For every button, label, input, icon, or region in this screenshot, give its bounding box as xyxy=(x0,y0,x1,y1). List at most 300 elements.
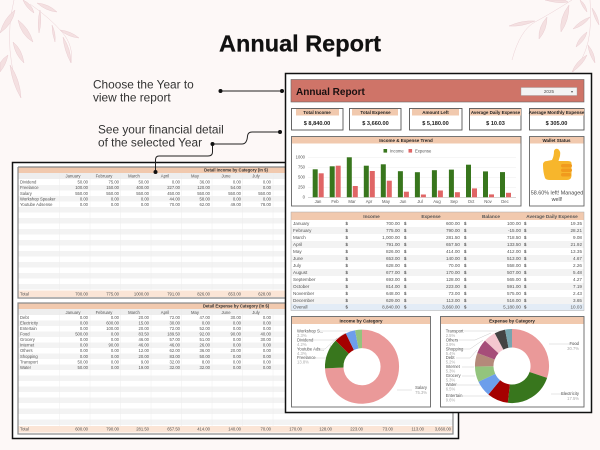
table: monthly summary: Income xyxy=(363,214,380,219)
panel: detail income table: 700.00 xyxy=(75,292,89,296)
panel: detail income table: 0.00 xyxy=(233,180,242,184)
panel: detail income table: 550.00 xyxy=(106,191,120,196)
table: monthly summary: October xyxy=(293,284,310,289)
panel: detail expense table: 0.00 xyxy=(80,337,89,342)
panel: detail expense table: 790.00 xyxy=(106,426,120,432)
panel: detail expense table: 0.00 xyxy=(111,365,120,370)
panel: detail income table: March xyxy=(128,174,140,178)
chart: income and expense trend: Income & Expense Trend xyxy=(379,138,433,143)
table: monthly summary: 814.00 xyxy=(386,284,400,289)
panel: detail expense table: 9.00 xyxy=(141,360,150,364)
table: monthly summary: $ xyxy=(464,235,467,240)
chart: expense by category donut: Shopping xyxy=(446,346,464,352)
panel: detail expense table: 47.00 xyxy=(200,315,211,320)
panel: detail income table: 58.00 xyxy=(200,196,211,202)
panel: detail expense table: 70.00 xyxy=(261,426,272,432)
panel: detail expense table: 414.00 xyxy=(197,426,211,432)
chart: expense by category donut: Transport xyxy=(446,328,464,334)
chart: expense by category donut: Water xyxy=(446,382,457,387)
table: monthly summary: 516.00 xyxy=(507,298,521,303)
table: monthly summary: 775.00 xyxy=(386,228,400,233)
annotation: choose the year: Choose the Year to xyxy=(93,78,194,92)
panel: detail expense table: 46.00 xyxy=(139,337,150,342)
panel: detail income table: 0.00 xyxy=(80,202,89,207)
panel: detail income table: 826.00 xyxy=(197,292,211,296)
chart: expense by category donut: 30.7% xyxy=(567,346,579,351)
panel: detail expense table: 281.50 xyxy=(136,426,150,432)
panel: detail income table: 100.00 xyxy=(75,185,89,190)
table: monthly summary: 133.50 xyxy=(507,242,521,247)
panel: detail expense table: 0.00 xyxy=(263,320,272,326)
panel: detail expense table: 0.00 xyxy=(263,354,272,359)
table: monthly summary: 414.00 xyxy=(446,249,460,254)
table: monthly summary: $ xyxy=(464,298,467,303)
header banner: 2025 xyxy=(544,89,555,94)
table: monthly summary: $ xyxy=(404,228,407,233)
panel: detail income table: 0.00 xyxy=(263,196,272,202)
panel: detail expense table: 0.00 xyxy=(233,365,242,370)
table: monthly summary: 128.00 xyxy=(446,277,460,282)
panel: detail expense table: 92.00 xyxy=(200,332,211,336)
table: monthly summary: 718.50 xyxy=(507,235,521,240)
panel: detail expense table: 0.00 xyxy=(263,326,272,331)
panel: detail expense table: Debt xyxy=(20,315,30,320)
panel: detail expense table: 0.00 xyxy=(263,315,272,320)
panel: detail expense table: 20.00 xyxy=(139,354,150,359)
panel: detail expense table: 90.00 xyxy=(109,342,120,348)
panel: detail expense table: 50.00 xyxy=(78,360,89,364)
table: monthly summary: Balance xyxy=(482,214,500,219)
chart: expense by category donut: 9.6% xyxy=(446,398,456,402)
panel: detail expense table: 0.00 xyxy=(233,360,242,364)
table: monthly summary: July xyxy=(293,263,302,268)
table: monthly summary: 653.00 xyxy=(386,256,400,261)
table: monthly summary: 28.21 xyxy=(570,228,582,233)
panel: detail expense table: 12.00 xyxy=(139,348,150,353)
table: monthly summary: $ xyxy=(404,263,407,268)
table: monthly summary: 70.00 xyxy=(448,263,460,268)
table: monthly summary: $ xyxy=(524,228,527,233)
panel: detail expense table: 0.00 xyxy=(263,342,272,348)
table: monthly summary: $ xyxy=(346,284,348,289)
kpi: total income: $ 8,840.00 xyxy=(304,121,330,127)
table: monthly summary: $ xyxy=(464,304,467,310)
table: monthly summary: $ xyxy=(464,270,467,275)
chart: income by category donut: 3.3% xyxy=(297,333,307,338)
table: monthly summary: 558.00 xyxy=(507,263,521,268)
panel: detail income table: 400.00 xyxy=(136,185,150,190)
table: monthly summary: $ xyxy=(524,221,527,226)
table: monthly summary: 140.00 xyxy=(446,256,460,261)
panel: detail expense table: 46.00 xyxy=(170,342,181,348)
table: monthly summary: $ xyxy=(524,256,527,261)
panel: detail income table: 0.00 xyxy=(141,196,150,202)
panel: detail income table: 0.00 xyxy=(263,180,272,184)
panel: detail expense table: 20.00 xyxy=(139,315,150,320)
panel: detail expense table: 30.00 xyxy=(261,337,272,342)
chart: income and expense trend xyxy=(292,136,521,206)
table: monthly summary: $ xyxy=(346,256,348,261)
chart: income and expense trend: Mar xyxy=(348,199,356,204)
table: monthly summary: 223.00 xyxy=(446,284,460,289)
table: monthly summary: 3.65 xyxy=(573,298,582,303)
chart: income and expense trend: Feb xyxy=(331,199,339,204)
header banner: Annual Report xyxy=(296,87,366,98)
wallet message xyxy=(531,190,583,203)
table: monthly summary: $ xyxy=(464,242,467,247)
panel: detail expense table: 0.00 xyxy=(80,342,89,348)
chart: income and expense trend: Dec xyxy=(501,199,509,204)
panel: detail income table: 550.00 xyxy=(197,191,211,196)
panel: detail expense table: 0.00 xyxy=(111,354,120,359)
panel: detail income table: 62.00 xyxy=(200,202,211,207)
panel: detail income table: 550.00 xyxy=(258,191,272,196)
chart: income and expense trend: Sep xyxy=(450,199,458,204)
panel: detail income table: 628.00 xyxy=(258,292,272,296)
table: monthly summary: June xyxy=(293,256,303,261)
panel: detail expense table: April xyxy=(161,310,169,315)
panel: detail expense table: 113.00 xyxy=(412,426,425,432)
table: monthly summary: January xyxy=(293,221,310,226)
panel: detail income table: April xyxy=(161,174,169,178)
panel: detail expense table: May xyxy=(191,310,200,315)
kpi: average daily expense xyxy=(470,108,521,130)
chart: expense by category donut: Internet xyxy=(446,364,461,369)
panel: detail expense table: June xyxy=(221,310,231,315)
annotation: financial detail xyxy=(98,122,224,150)
table: monthly summary: 600.00 xyxy=(446,221,460,226)
panel: detail income table: 0.00 xyxy=(263,185,272,190)
table: monthly summary: 10.03 xyxy=(570,304,582,310)
table: monthly summary: 4.27 xyxy=(573,277,582,282)
annotation: financial detail: of the selected Year xyxy=(98,136,202,150)
chart: income and expense trend: 750 xyxy=(298,164,306,170)
chart: income and expense trend: 250 xyxy=(298,184,306,190)
chart: income by category donut: Youtube Ads... xyxy=(297,346,324,352)
panel: detail expense table: 140.00 xyxy=(228,426,242,432)
panel: detail expense table: 40.00 xyxy=(261,332,272,336)
panel: detail expense table xyxy=(18,303,453,434)
panel: detail expense table: 30.00 xyxy=(231,315,242,320)
panel: detail income table: 36.00 xyxy=(200,180,211,184)
panel: detail income table: 50.00 xyxy=(78,180,89,184)
table: monthly summary: $ xyxy=(524,263,527,268)
panel: detail expense table: Internet xyxy=(20,342,35,348)
table: monthly summary: $ xyxy=(404,277,407,282)
table: monthly summary: 170.00 xyxy=(446,270,460,275)
chart: expense by category donut xyxy=(440,316,584,407)
panel: detail sheets xyxy=(12,162,458,438)
panel: detail expense table: 0.00 xyxy=(111,315,120,320)
kpi: average daily expense: $ 10.03 xyxy=(486,121,505,127)
annotation: financial detail: See your financial detail xyxy=(98,122,224,136)
panel: detail expense table: 0.00 xyxy=(233,337,242,342)
panel: detail income table: July xyxy=(252,174,261,178)
table: monthly summary: $ xyxy=(464,228,467,233)
legend: Income xyxy=(390,148,404,154)
table: monthly summary: 5.48 xyxy=(573,270,582,275)
panel: detail income table: 1000.00 xyxy=(134,292,150,296)
panel: detail expense table: 0.00 xyxy=(80,320,89,326)
panel: detail expense table: January xyxy=(66,310,81,315)
wallet message: 58.60% left! Managed xyxy=(531,190,583,196)
table: monthly summary: $ xyxy=(524,235,527,240)
table: monthly summary: 100.00 xyxy=(507,221,521,226)
panel: detail expense table: 8.00 xyxy=(202,360,211,364)
kpi: total expense xyxy=(350,108,401,130)
table: monthly summary: 7.19 xyxy=(573,284,582,289)
table: monthly summary: $ xyxy=(346,263,348,268)
chart: expense by category donut: Entertain xyxy=(446,393,463,398)
legend xyxy=(384,148,432,154)
table: monthly summary: 826.00 xyxy=(386,249,400,254)
panel: detail expense table: 600.00 xyxy=(106,320,120,326)
panel: detail expense table: 32.00 xyxy=(170,365,181,370)
table: monthly summary: 513.00 xyxy=(507,256,521,261)
table: monthly summary: $ xyxy=(464,277,467,282)
chart: expense by category donut: Electricity xyxy=(561,391,580,396)
panel: detail income table: 791.00 xyxy=(167,292,181,296)
chart: expense by category donut: 5.2% xyxy=(446,360,456,364)
panel: detail income table: 653.00 xyxy=(228,292,242,296)
panel: detail expense table: Food xyxy=(20,332,30,336)
table: monthly summary: $ xyxy=(524,298,527,303)
panel: detail expense table: July xyxy=(252,310,261,315)
panel: detail income table: 775.00 xyxy=(106,292,120,296)
panel: detail expense table: 0.00 xyxy=(233,342,242,348)
panel: detail income table: 70.00 xyxy=(170,202,181,207)
kpi: total expense: $ 3,660.00 xyxy=(362,121,389,127)
kpi: average monthly expense: Average Monthly Expense xyxy=(529,110,585,115)
chart: income and expense trend: May xyxy=(382,199,391,204)
panel: detail expense table: 51.00 xyxy=(200,337,211,342)
table: monthly summary: 8,840.00 xyxy=(382,304,400,310)
chart: expense by category donut: 5.4% xyxy=(446,351,456,356)
panel: detail income table: Dividend xyxy=(20,180,37,184)
table: monthly summary: $ xyxy=(464,256,467,261)
panel: detail income table: June xyxy=(221,174,231,178)
chart: income by category donut: Freelance xyxy=(297,355,316,360)
table: monthly summary: August xyxy=(293,270,308,275)
panel: detail income table: 550.00 xyxy=(228,191,242,196)
panel: detail income table: 150.00 xyxy=(106,185,120,190)
panel: detail expense table: March xyxy=(128,310,140,315)
chart: income and expense trend: Jul xyxy=(417,199,423,204)
table: monthly summary: 565.00 xyxy=(507,277,521,282)
expense bars xyxy=(319,166,511,197)
panel: detail income table: February xyxy=(96,174,113,178)
header banner: ▾ xyxy=(571,89,573,94)
chart: income and expense trend: Nov xyxy=(484,199,493,204)
panel: detail expense table: February xyxy=(96,310,113,315)
kpi: total income xyxy=(292,108,343,130)
panel: detail expense table: 57.00 xyxy=(170,337,181,342)
panel: detail expense table: 19.00 xyxy=(139,365,150,370)
table: monthly summary: $ xyxy=(346,270,348,275)
panel: detail expense table: Total xyxy=(20,426,29,432)
annotation: choose the year: view the report xyxy=(93,90,171,104)
table: monthly summary: May xyxy=(293,249,302,254)
panel: detail income table: 450.00 xyxy=(167,191,181,196)
panel: detail expense table: 72.00 xyxy=(170,315,181,320)
panel: detail expense table: 0.00 xyxy=(111,332,120,336)
panel: detail expense table: 0.00 xyxy=(202,320,211,326)
panel: detail income table: 44.00 xyxy=(170,196,181,202)
panel: detail income table: 550.00 xyxy=(75,191,89,196)
panel: detail expense table: 20.00 xyxy=(231,348,242,353)
panel: detail expense table: 0.00 xyxy=(111,337,120,342)
table: monthly summary: $ xyxy=(404,304,407,310)
chart: expense by category donut: 5.3% xyxy=(446,378,456,382)
table: monthly summary: $ xyxy=(404,270,407,275)
panel: detail expense table: Grocery xyxy=(20,337,36,342)
table: monthly summary: 790.00 xyxy=(446,228,460,233)
chart: expense by category donut: Debt xyxy=(446,355,455,360)
decoration: top-right leaves xyxy=(509,0,599,72)
panel: detail expense table: 189.50 xyxy=(167,332,181,336)
chart: income by category donut: 75.3% xyxy=(415,390,427,395)
panel: detail expense table: 3,660.00 xyxy=(435,426,452,432)
table: monthly summary: 21.92 xyxy=(570,242,582,247)
kpi: amount left: Amount Left xyxy=(422,110,449,115)
table: monthly summary: 628.00 xyxy=(386,263,400,268)
panel: detail income table: 120.00 xyxy=(197,185,211,190)
table: monthly summary: $ xyxy=(404,284,407,289)
table: monthly summary: 693.00 xyxy=(386,277,400,282)
table: monthly summary: 73.00 xyxy=(448,291,460,296)
chart: income and expense trend: 1000 xyxy=(296,154,306,160)
table: monthly summary: -15.00 xyxy=(508,228,521,233)
table: monthly summary: 2.26 xyxy=(573,263,582,268)
panel: detail expense table: 0.00 xyxy=(80,348,89,353)
table: monthly summary: $ xyxy=(404,256,407,261)
panel: detail expense table: Shopping xyxy=(20,354,38,359)
panel: detail income table: 0.00 xyxy=(172,180,181,184)
panel: detail expense table: 128.00 xyxy=(319,426,333,432)
panel: detail income table: 0.00 xyxy=(111,196,120,202)
chart: expense by category donut: Food xyxy=(569,341,580,346)
chart: income and expense trend: 0 xyxy=(303,194,306,200)
panel: detail expense table: 0.00 xyxy=(80,326,89,331)
table: monthly summary: 412.00 xyxy=(507,249,521,254)
chart: income by category donut: Salary xyxy=(415,385,428,390)
table: monthly summary: 575.00 xyxy=(507,291,521,296)
chart: expense by category donut: Expense by Category xyxy=(489,318,535,323)
panel: detail expense table: 15.00 xyxy=(139,320,150,326)
annotation: choose the year xyxy=(93,78,194,104)
table: monthly summary: February xyxy=(293,228,312,233)
table: monthly summary: $ xyxy=(404,249,407,254)
chart: income and expense trend: Aug xyxy=(433,199,441,204)
chart: income and expense trend: Oct xyxy=(468,199,475,204)
table: monthly summary: November xyxy=(293,291,315,296)
chart: income by category donut: 13.8% xyxy=(297,360,309,364)
panel: detail expense table: 32.00 xyxy=(200,365,211,370)
table: monthly summary: April xyxy=(293,242,302,247)
panel: detail expense table: 26.00 xyxy=(200,342,211,348)
table: monthly summary: $ xyxy=(464,263,467,268)
panel: detail expense table: 52.00 xyxy=(200,326,211,331)
panel: detail income table: Workshop Speaker xyxy=(20,196,56,202)
table: monthly summary: December xyxy=(293,298,315,303)
table: monthly summary: $ xyxy=(404,291,407,296)
table: monthly summary: 281.50 xyxy=(446,235,460,240)
table: monthly summary: 507.00 xyxy=(507,270,521,275)
table: monthly summary: $ xyxy=(464,284,467,289)
table: monthly summary: 648.00 xyxy=(386,291,400,296)
chart: expense by category donut: 3.9% xyxy=(446,342,456,347)
table: monthly summary: 3,660.00 xyxy=(442,304,460,310)
panel: detail income table: Total xyxy=(20,292,29,296)
panel: detail expense table: 0.00 xyxy=(80,315,89,320)
panel: wallet status: Wallet Status xyxy=(542,138,571,143)
table: monthly summary: $ xyxy=(464,291,467,296)
panel: detail income table: Freelance xyxy=(20,185,39,190)
kpi: total expense: Total Expense xyxy=(360,110,391,115)
table: monthly summary: $ xyxy=(404,298,407,303)
panel: detail expense table: 0.00 xyxy=(263,365,272,370)
panel: detail income table xyxy=(18,167,308,298)
table: monthly summary: 113.00 xyxy=(446,298,460,303)
chart: income by category donut: Workshop S... xyxy=(297,328,323,334)
chart: expense by category donut: 5.3% xyxy=(446,368,456,374)
table: monthly summary: 629.00 xyxy=(386,298,400,303)
chart: income and expense trend: Jun xyxy=(400,199,407,204)
arrow: year selector connector xyxy=(218,89,284,93)
chart: income and expense trend: Apr xyxy=(366,199,373,204)
table: monthly summary: September xyxy=(293,277,316,282)
panel: detail expense table: 36.00 xyxy=(200,348,211,353)
panel: detail expense table: Water xyxy=(20,365,32,370)
table: monthly summary: $ xyxy=(524,242,527,247)
table: monthly summary: $ xyxy=(404,221,407,226)
panel: detail expense table: 46.00 xyxy=(139,342,150,348)
table: monthly summary: 19.35 xyxy=(570,221,582,226)
panel: detail expense table: 0.00 xyxy=(80,354,89,359)
chart: expense by category donut: 17.5% xyxy=(567,396,579,401)
panel: detail income table: 54.00 xyxy=(231,185,242,190)
chart: income by category donut: Dividend xyxy=(297,338,314,342)
table: monthly summary: $ xyxy=(524,277,527,282)
panel: detail expense table: 72.00 xyxy=(170,326,181,331)
table: monthly summary: 700.00 xyxy=(386,221,400,226)
table: monthly summary: 791.00 xyxy=(386,242,400,247)
table: monthly summary: 1,000.00 xyxy=(382,235,400,240)
panel: detail expense table: Detail Expense by Category (in $) xyxy=(203,304,270,308)
panel: detail expense table: 83.00 xyxy=(170,354,181,359)
panel: detail income table: 78.00 xyxy=(261,202,272,207)
panel: detail income table: 550.00 xyxy=(136,191,150,196)
chart: expense by category donut: 2.5% xyxy=(446,333,456,338)
panel: detail income table: 0.00 xyxy=(141,202,150,207)
table: monthly summary: $ xyxy=(346,249,348,254)
panel: detail expense table: 0.00 xyxy=(233,354,242,359)
panel: detail expense table: Transport xyxy=(20,360,39,364)
table: monthly summary: $ xyxy=(404,242,407,247)
table: monthly summary: 591.00 xyxy=(507,284,521,289)
panel: detail income table: 227.00 xyxy=(167,185,181,190)
panel: detail income table: 50.00 xyxy=(139,180,150,184)
panel: detail income table: Detail Income by Category (in $) xyxy=(204,168,268,172)
table: monthly summary: $ xyxy=(346,242,348,247)
table: monthly summary: $ xyxy=(346,291,348,296)
kpi: average daily expense: Average Daily Expense xyxy=(471,110,521,115)
panel: detail income table: May xyxy=(191,174,200,178)
panel: detail income table: 75.00 xyxy=(109,180,120,184)
chart: income and expense trend: 500 xyxy=(298,174,306,180)
table: monthly summary: 13.35 xyxy=(570,249,582,254)
panel: detail expense table: Electricity xyxy=(20,320,39,326)
